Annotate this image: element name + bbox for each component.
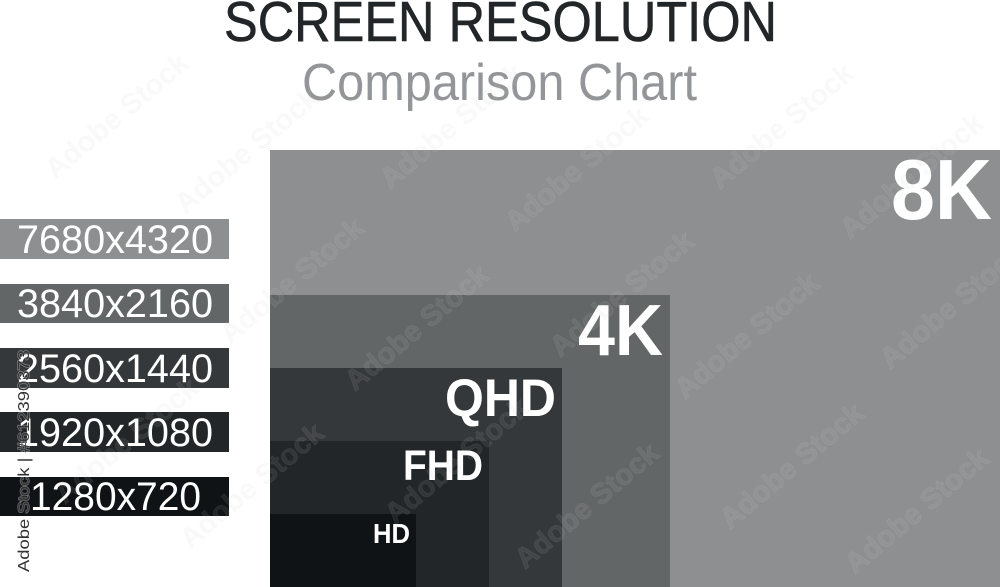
watermark: diagonal stock marks: Adobe Stock — [704, 56, 861, 195]
watermark: diagonal stock marks: Adobe Stock — [374, 56, 531, 195]
watermark: diagonal stock marks: Adobe Stock — [544, 224, 701, 363]
panel: FHD area — [270, 441, 489, 587]
watermark: diagonal stock marks: Adobe Stock — [839, 441, 996, 580]
watermark: diagonal stock marks: Adobe Stock — [499, 99, 656, 238]
legend bar: 1280x720: 1280x720 — [30, 475, 201, 519]
watermark: diagonal stock marks: Adobe Stock — [49, 371, 206, 510]
panel: HD area — [270, 514, 416, 587]
nested resolution chart — [270, 143, 1000, 587]
legend bar: 7680x4320: 7680x4320 — [17, 218, 213, 262]
watermark: diagonal stock marks: Adobe Stock — [214, 211, 371, 350]
panel: HD area: HD — [373, 518, 410, 549]
subtitle: Comparison Chart — [302, 54, 698, 112]
panel: QHD area: QHD — [445, 369, 556, 428]
legend bar: 3840x2160: 3840x2160 — [17, 282, 213, 326]
watermark: diagonal stock marks: Adobe Stock — [834, 106, 991, 245]
watermark: diagonal stock marks: Adobe Stock — [169, 81, 326, 220]
panel: QHD area — [270, 368, 562, 587]
legend bar: 2560x1440: 2560x1440 — [17, 347, 213, 391]
resolution legend — [0, 218, 229, 519]
watermark: diagonal stock marks: Adobe Stock — [379, 391, 536, 530]
panel: 4K area: 4K — [578, 291, 663, 371]
watermark: vertical stock credit: Adobe Stock | #612390373 — [16, 350, 33, 572]
watermark: diagonal stock marks: Adobe Stock — [39, 46, 196, 185]
watermark: diagonal stock marks: Adobe Stock — [669, 266, 826, 405]
watermark: diagonal stock marks: Adobe Stock — [714, 396, 871, 535]
legend bar: 1920x1080: 1920x1080 — [17, 411, 213, 455]
panel: 4K area — [270, 291, 670, 587]
watermark: diagonal stock marks: Adobe Stock — [339, 258, 496, 397]
watermark: diagonal stock marks: Adobe Stock — [174, 416, 331, 555]
watermark: diagonal stock marks: Adobe Stock — [509, 436, 666, 575]
panel: 8K area: 8K — [891, 143, 992, 238]
panel: FHD area: FHD — [403, 442, 483, 490]
